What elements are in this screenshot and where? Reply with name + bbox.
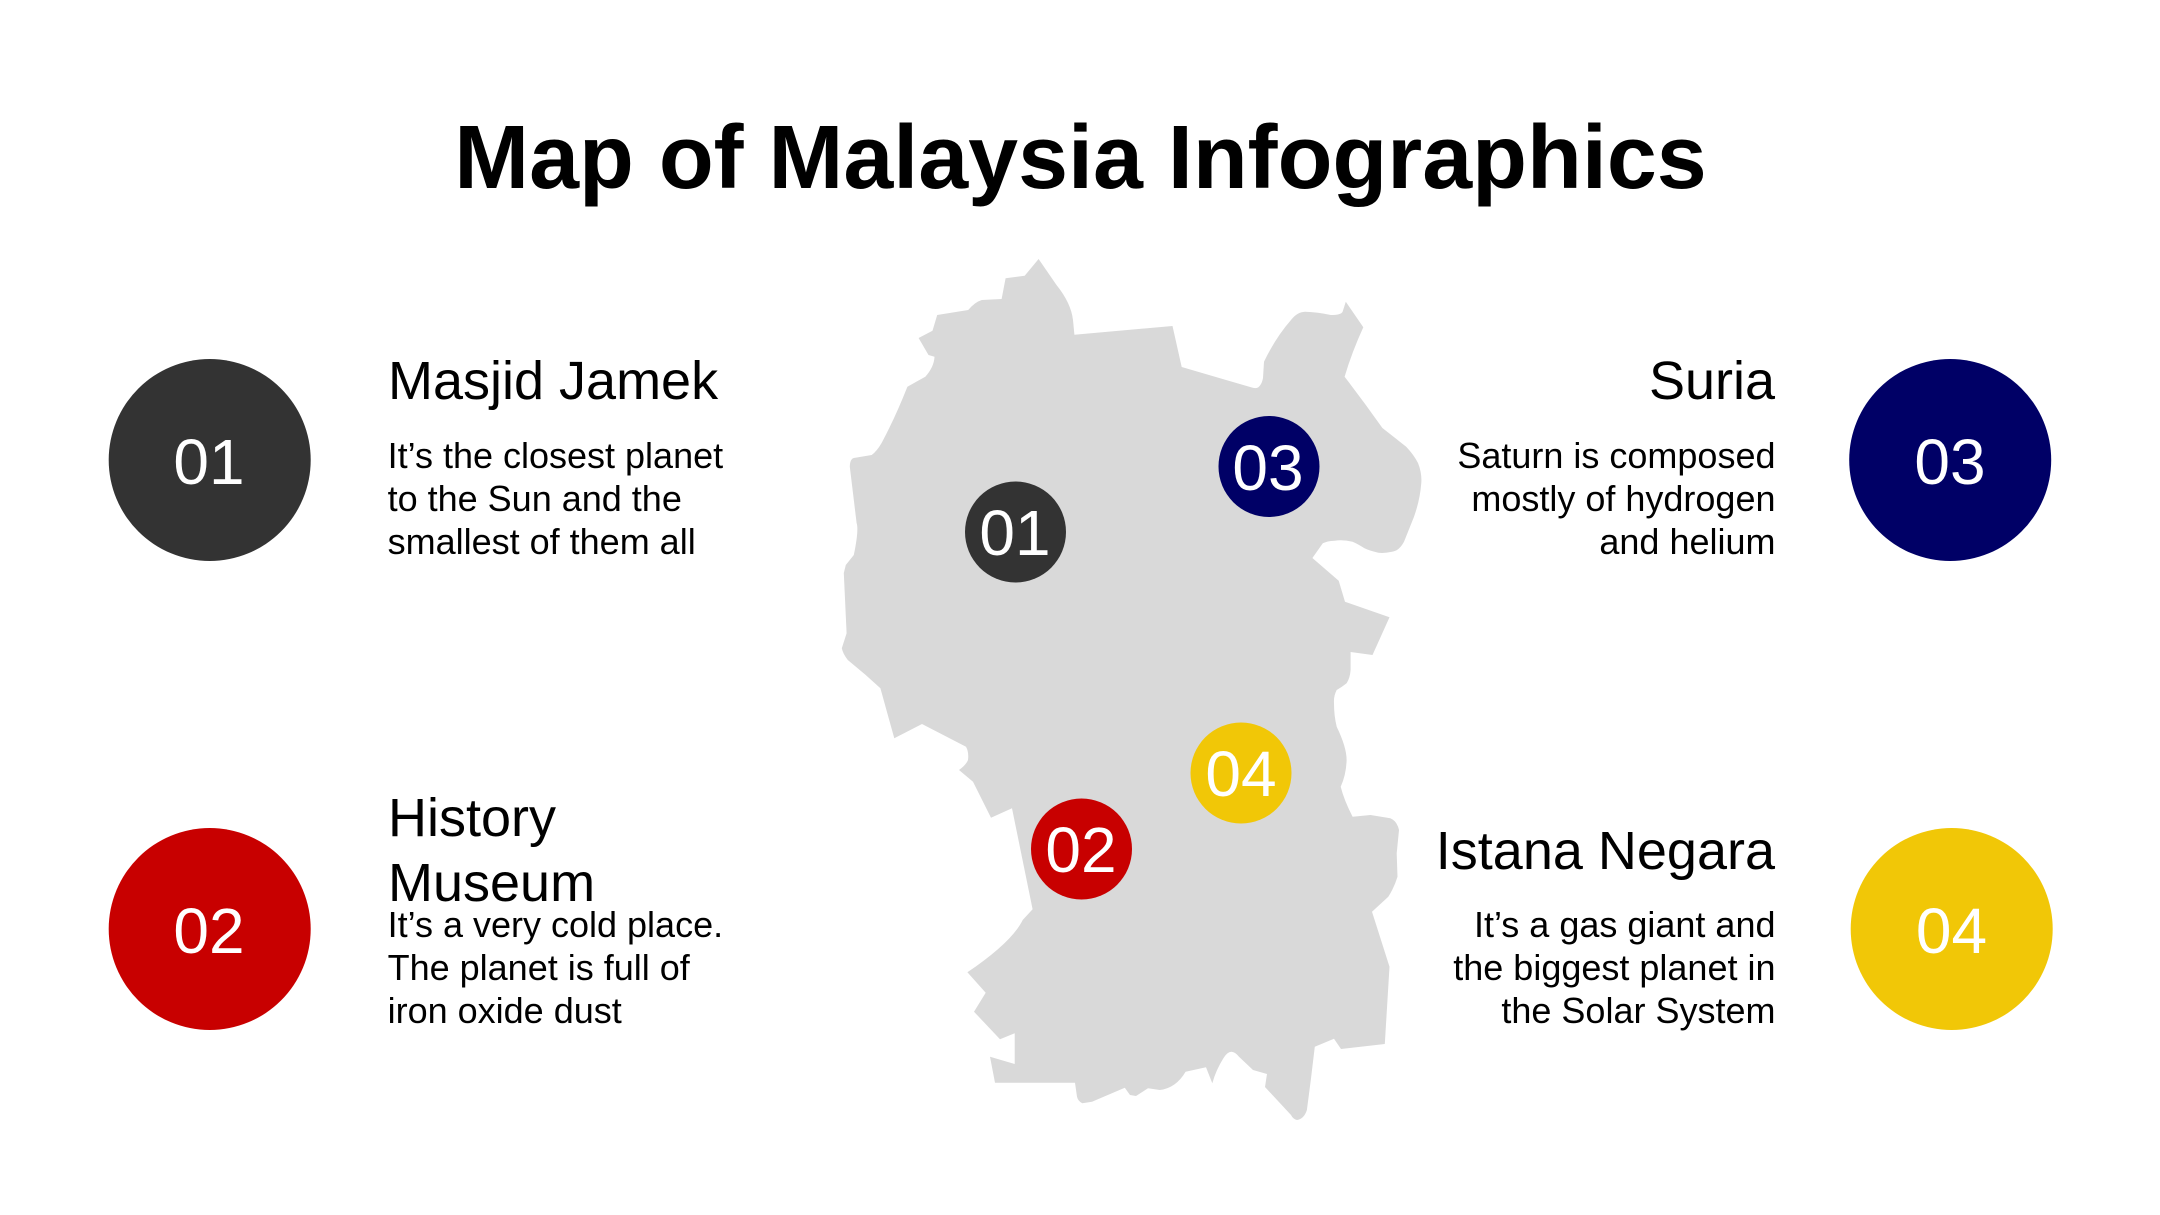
text: History Museum description: It’s a very cold place.	[388, 904, 723, 945]
text: Istana Negara description: It’s a gas giant and	[1474, 904, 1776, 945]
map marker 03	[1218, 416, 1320, 517]
badge 03: 03	[1914, 426, 1986, 498]
map marker 01	[965, 482, 1066, 582]
text: Istana Negara description: the Solar System	[1501, 990, 1776, 1031]
text: Suria description: Saturn is composed	[1457, 435, 1776, 476]
text: Masjid Jamek description: to the Sun and the	[388, 478, 682, 519]
panel: 03 Suria	[1457, 351, 2051, 562]
panel: 02 History Museum	[109, 788, 723, 1031]
text: Suria description: and helium	[1599, 521, 1776, 562]
badge 01	[109, 359, 311, 561]
map marker 04	[1190, 722, 1292, 824]
heading: History Museum: History	[388, 788, 556, 848]
text: History Museum description: The planet is full of	[388, 947, 691, 988]
text: History Museum description: iron oxide dust	[388, 990, 622, 1031]
map of Malaysia	[842, 259, 1421, 1120]
text: Suria description: mostly of hydrogen	[1471, 478, 1776, 519]
badge 02	[109, 828, 311, 1030]
badge 01: 01	[173, 426, 245, 498]
heading: History Museum: Museum	[388, 853, 595, 913]
map marker 02	[1031, 798, 1132, 900]
badge 03	[1849, 359, 2051, 561]
heading: Istana Negara: Istana Negara	[1436, 821, 1776, 881]
text: Masjid Jamek description: smallest of them all	[388, 521, 696, 562]
title: Map of Malaysia Infographics	[454, 108, 1707, 208]
badge 02: 02	[173, 895, 245, 967]
map marker 04: 04	[1205, 738, 1277, 810]
heading: Masjid Jamek: Masjid Jamek	[388, 351, 719, 411]
panel: 04 Istana Negara	[1436, 821, 2053, 1031]
text: Masjid Jamek description: It’s the closest planet	[388, 435, 723, 476]
map marker 01: 01	[979, 497, 1051, 569]
panel: 01 Masjid Jamek	[109, 351, 723, 562]
text: Istana Negara description: the biggest planet in	[1453, 947, 1776, 988]
badge 04	[1851, 828, 2053, 1030]
badge 04: 04	[1916, 895, 1987, 967]
heading: Suria: Suria	[1649, 351, 1776, 411]
map marker 02: 02	[1045, 814, 1117, 886]
map marker 03: 03	[1232, 432, 1304, 504]
